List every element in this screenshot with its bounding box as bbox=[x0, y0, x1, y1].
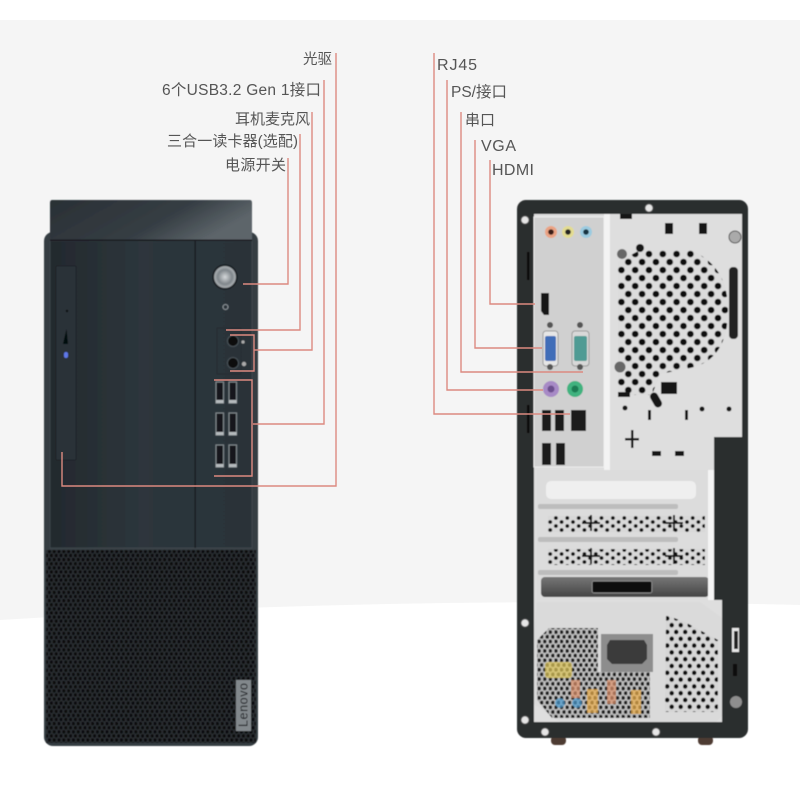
front USB ports bbox=[216, 382, 236, 467]
slot edge strip bbox=[708, 470, 714, 600]
label: serial: 串口 bbox=[465, 112, 495, 129]
front mesh grille bbox=[46, 550, 256, 743]
leader lines for rear ports bbox=[434, 53, 583, 414]
cap shadow line bbox=[50, 240, 252, 241]
rear USB ports bbox=[542, 410, 565, 465]
label: USB ports: 6个USB3.2 Gen 1接口 bbox=[162, 81, 321, 99]
power button bbox=[213, 265, 237, 310]
PS/2 leader bbox=[447, 80, 543, 390]
serial port bbox=[572, 322, 589, 370]
RJ45 leader bbox=[434, 53, 570, 414]
headset leader bbox=[230, 112, 312, 371]
silver rear panel bbox=[534, 214, 742, 722]
power switch leader bbox=[243, 158, 288, 284]
label: power switch: 电源开关 bbox=[225, 157, 286, 174]
expansion slot section bbox=[537, 470, 709, 600]
VGA leader bbox=[475, 140, 542, 348]
front door panel bbox=[50, 241, 252, 548]
PS/2 ports bbox=[543, 381, 583, 397]
serial leader bbox=[461, 112, 583, 372]
fan grille bbox=[618, 250, 728, 395]
leader lines for front ports bbox=[62, 53, 336, 486]
rear view of desktop tower bbox=[517, 200, 748, 745]
USB leader bbox=[214, 80, 324, 476]
label: HDMI: HDMI bbox=[492, 162, 534, 179]
side handle slot bbox=[729, 267, 738, 339]
panel divider bbox=[194, 241, 196, 548]
label: VGA: VGA bbox=[481, 138, 516, 155]
front view of desktop tower bbox=[44, 200, 258, 746]
RJ45 port bbox=[571, 410, 586, 431]
IO plate side slots bbox=[527, 252, 530, 433]
VGA port bbox=[543, 322, 558, 370]
HDMI port bbox=[541, 293, 549, 315]
optical drive leader bbox=[62, 53, 336, 486]
IO plate bbox=[527, 214, 610, 470]
label: PS/2: PS/接口 bbox=[451, 83, 507, 101]
label: headset and mic: 耳机麦克风 bbox=[235, 111, 310, 128]
label: optical drive: 光驱 bbox=[303, 51, 332, 68]
PSU coloured wires bbox=[545, 662, 641, 714]
HDMI leader bbox=[490, 160, 535, 304]
frame screws bbox=[521, 204, 741, 736]
Lenovo badge: Lenovo bbox=[236, 683, 250, 727]
power socket bbox=[601, 634, 653, 672]
serial connector bar bbox=[541, 577, 709, 597]
power supply bbox=[534, 602, 722, 722]
label: RJ45: RJ45 bbox=[437, 57, 477, 74]
PSU vent bbox=[537, 628, 650, 718]
side vent bbox=[665, 615, 718, 712]
rear chassis frame bbox=[517, 200, 748, 738]
side USB port bbox=[730, 628, 742, 708]
top cap bbox=[50, 200, 252, 240]
audio ports bbox=[545, 226, 592, 238]
rear feet bbox=[551, 736, 713, 745]
upper panel cutouts bbox=[614, 214, 732, 456]
front chassis body bbox=[44, 232, 258, 746]
perforated slot covers bbox=[548, 516, 705, 532]
audio jacks bbox=[217, 328, 246, 374]
optical drive bay bbox=[56, 266, 76, 460]
label: card reader: 三合一读卡器(选配) bbox=[167, 133, 298, 150]
card reader leader bbox=[226, 134, 300, 330]
